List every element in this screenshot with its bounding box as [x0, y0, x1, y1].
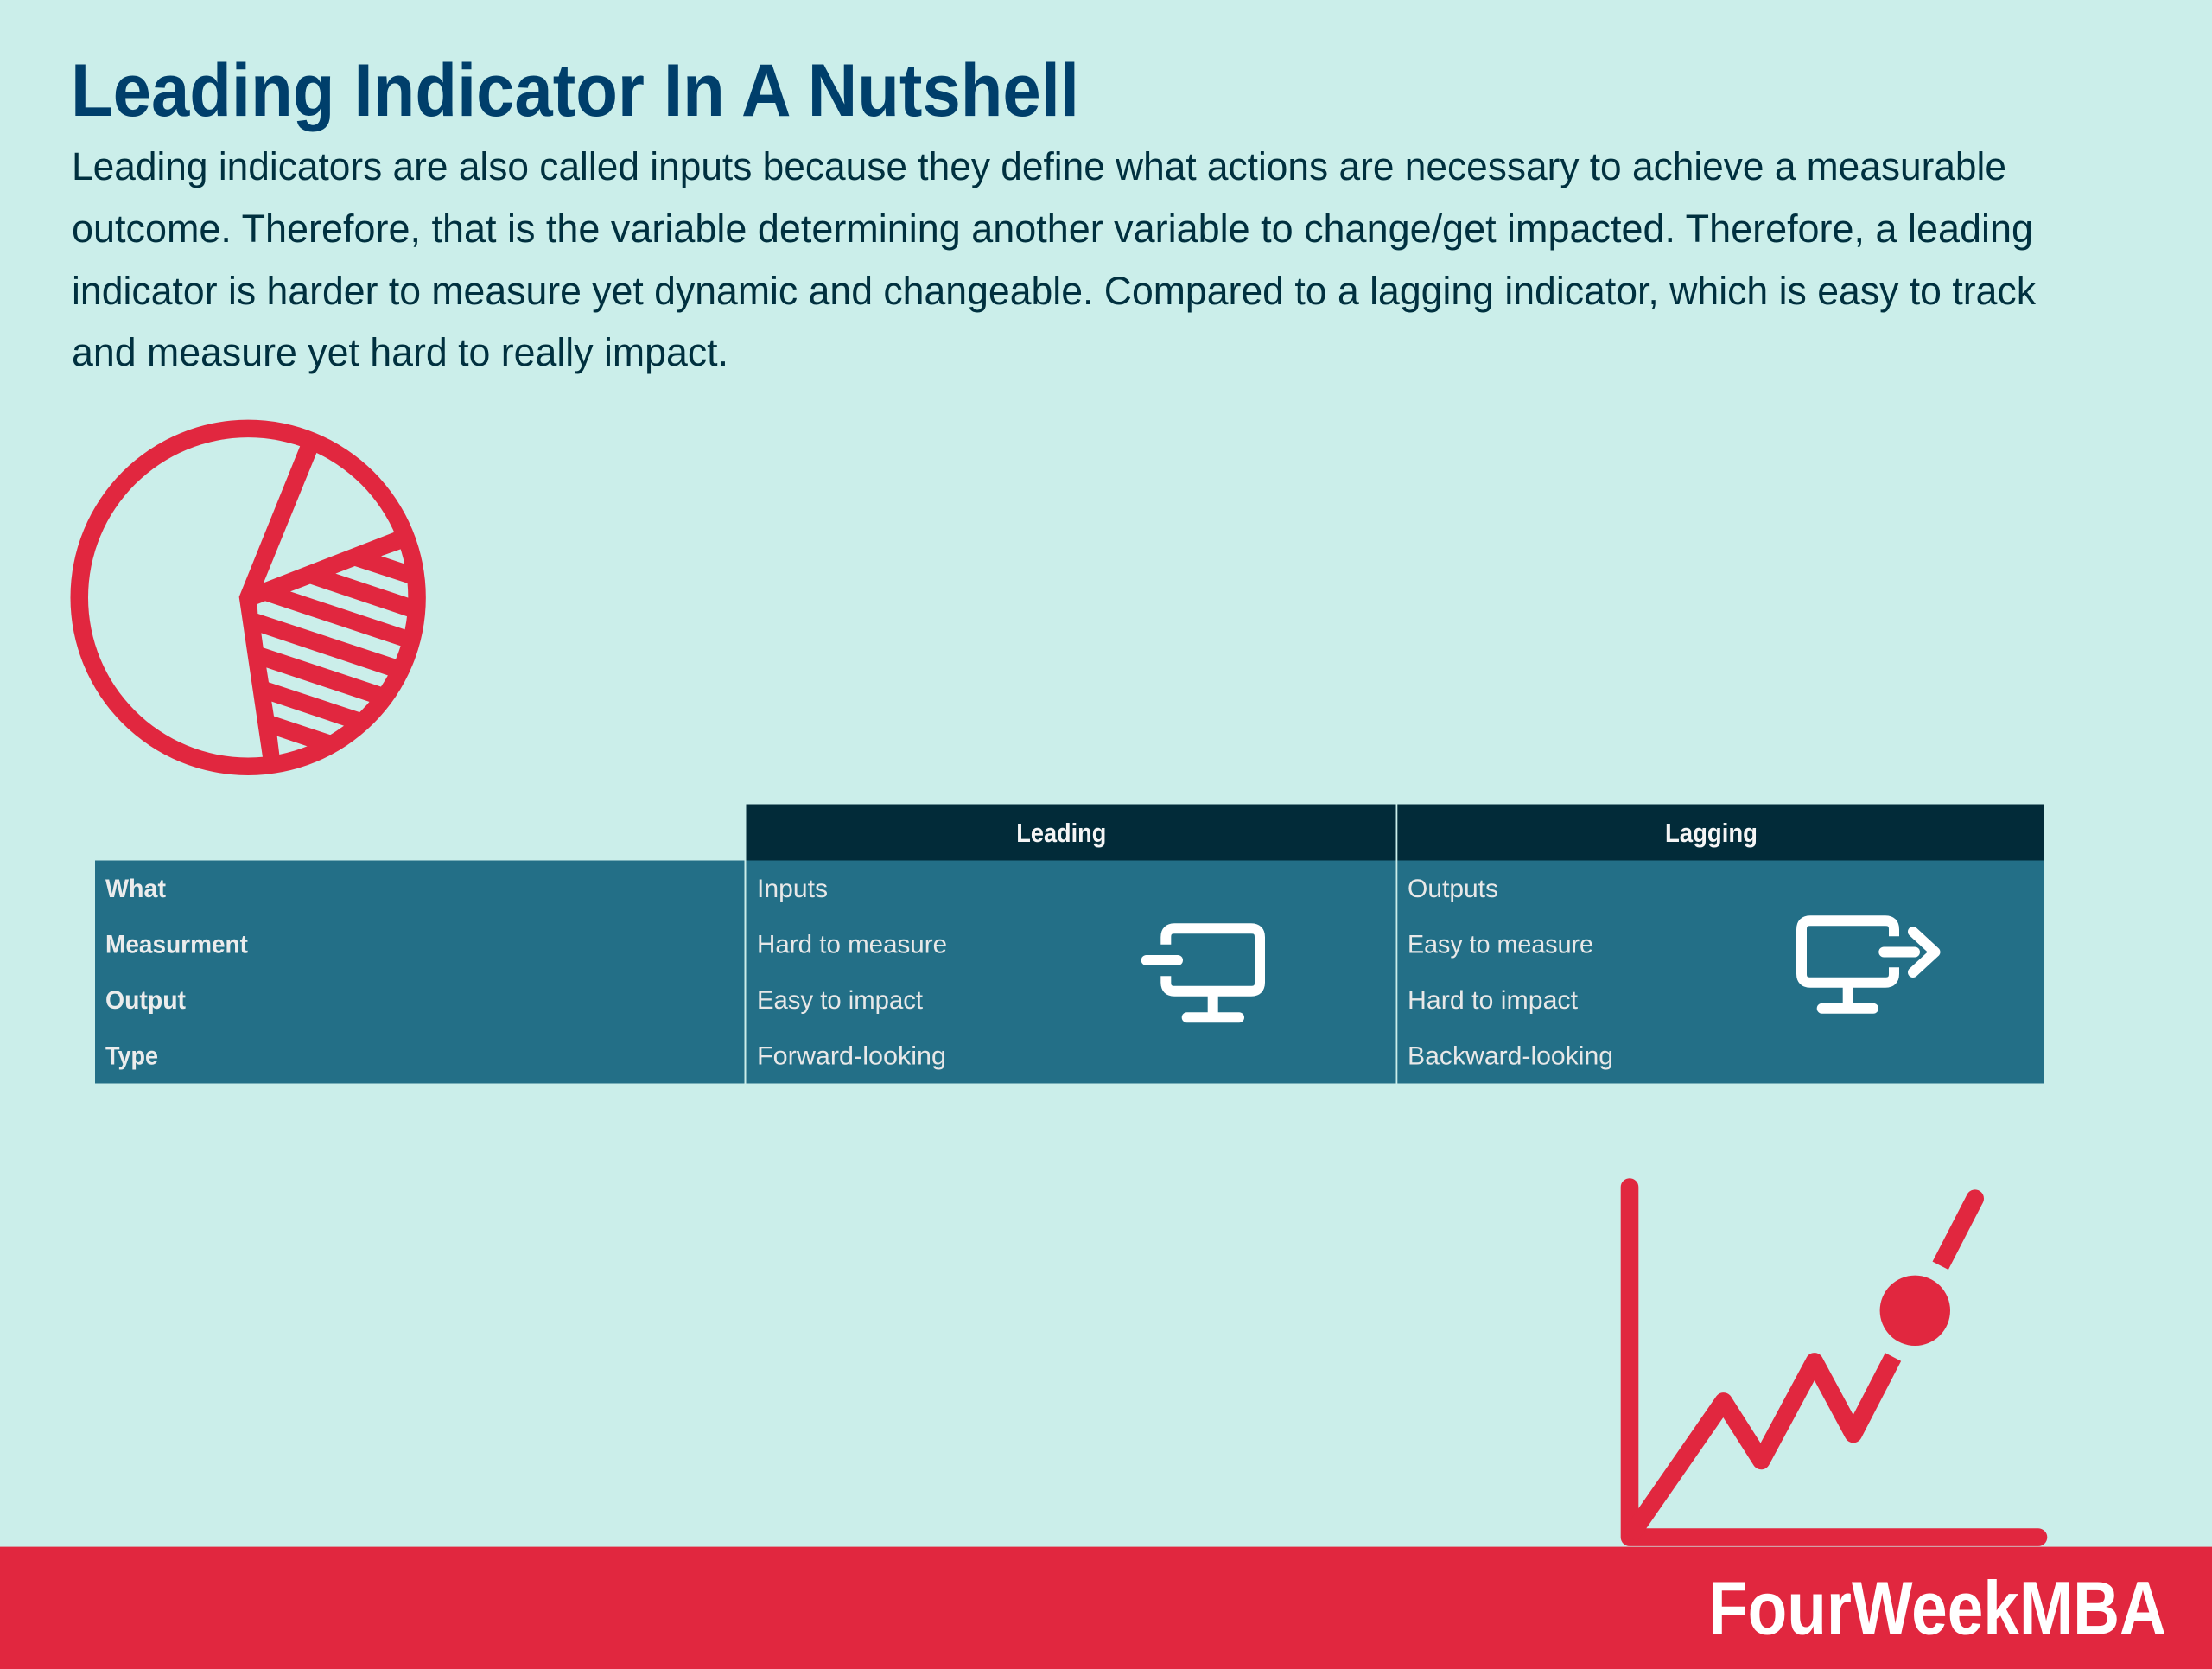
intro text block: indicator is harder to measure yet dynamic and changeable. Compared to a lagging indicator, which is easy to track [72, 269, 2036, 313]
leading column: Hard to measure [757, 930, 947, 959]
lagging column: Hard to impact [1408, 986, 1579, 1015]
intro text block: outcome. Therefore, that is the variable determining another variable to change/get impacted. Therefore, a leading [72, 207, 2033, 251]
lagging column: Easy to measure [1408, 930, 1593, 959]
table header: Lagging: Lagging [1665, 818, 1758, 848]
icon: monitor output [1802, 920, 1936, 1009]
leading column: Inputs [757, 875, 828, 903]
leading column: Forward-looking [757, 1042, 946, 1070]
title: Leading Indicator In A Nutshell [71, 49, 1079, 132]
footer band [0, 1547, 2212, 1669]
row labels column: Type [105, 1042, 158, 1070]
row labels column [95, 861, 745, 1084]
row labels column: What [105, 875, 166, 903]
intro text block: Leading indicators are also called inputs because they define what actions are necessary to achieve a measurable [72, 144, 2006, 188]
icon: pie chart with hatched slice [71, 420, 426, 775]
table header: Leading: Leading [1016, 818, 1106, 848]
table header: Lagging [1397, 804, 2044, 861]
leading column [747, 861, 1396, 1084]
icon: monitor input [1147, 928, 1260, 1017]
comparison table [0, 804, 2212, 1669]
lagging column: Backward-looking [1408, 1042, 1613, 1070]
leading column: Easy to impact [757, 986, 924, 1015]
table header: Leading [747, 804, 1396, 861]
row labels column: Measurment [105, 930, 248, 959]
lagging column: Outputs [1408, 875, 1498, 903]
intro text block [72, 144, 2036, 374]
lagging column [1397, 861, 2044, 1084]
icon: rising line chart [1630, 1188, 2038, 1538]
intro text block: and measure yet hard to really impact. [72, 330, 728, 374]
row labels column: Output [105, 986, 186, 1015]
